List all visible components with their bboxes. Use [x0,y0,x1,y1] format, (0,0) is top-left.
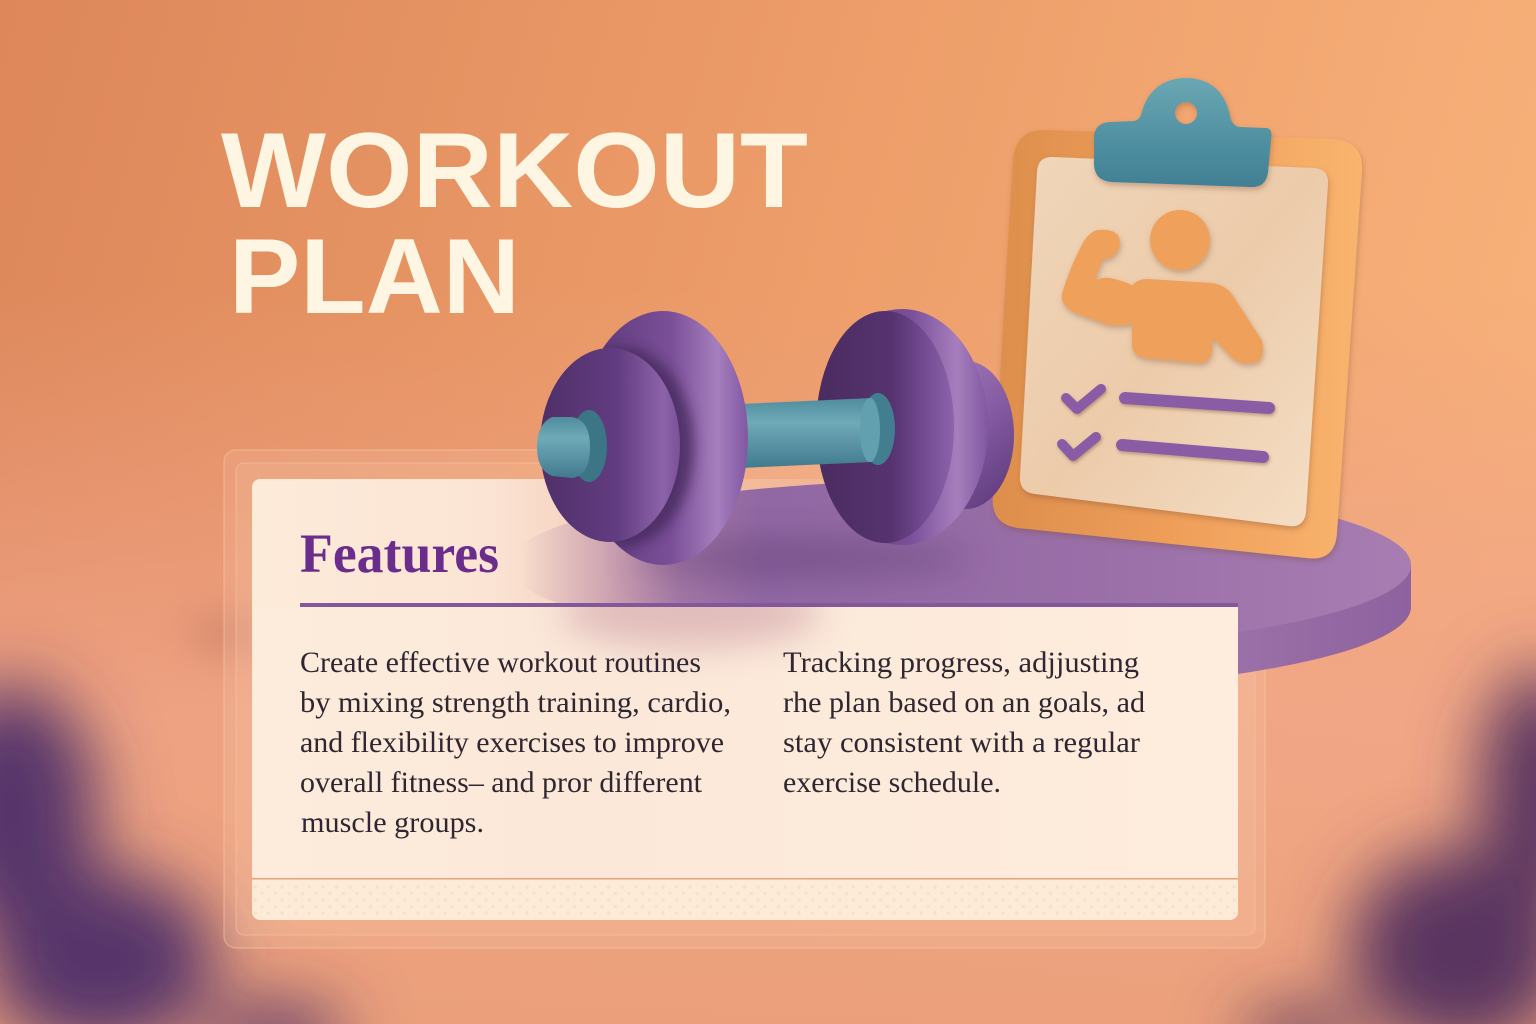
checklist row 1 [1066,389,1269,409]
left front plate [540,348,680,542]
end cap [537,417,590,478]
text block: left column: muscle groups. [301,806,484,839]
dumbbell [537,309,1014,565]
blurred purple foliage bottom right [1240,670,1536,1024]
panel: dotted footer strip [252,878,1238,920]
text block: left column: overall fitness– and pror different [300,766,703,799]
text block: right column: stay consistent with a regular [783,726,1140,759]
text block: right column: exercise schedule. [783,766,1001,799]
text block: left column [300,646,731,839]
right main plate rim [816,309,988,545]
end cap collar [571,410,607,482]
text block: right column: Tracking progress, adjjusting [783,646,1139,679]
icon: flexing figure head [1150,210,1210,270]
handle collar [861,393,895,465]
panel: top cream section [252,479,1238,607]
title [221,110,808,336]
right outer small plate [918,361,1014,509]
icon: flexing figure body [1064,232,1261,361]
title: PLAN [229,216,520,336]
clipboard paper [1020,157,1328,526]
soft pink shade in panel [554,607,827,664]
platform disc [535,484,1411,674]
clipboard board [993,130,1362,558]
text block: left column: and flexibility exercises to improve [300,726,724,759]
text block: right column [783,646,1145,799]
panel: outer glass frames [224,450,1265,948]
heading: features: Features [300,523,499,584]
handle bar [740,398,872,468]
soft shadow left of panel [185,612,275,656]
right main plate face [816,311,954,543]
left plate contact shadow [603,342,701,552]
text block: right column: rhe plan based on an goals, ad [783,686,1145,719]
title: WORKOUT [221,110,808,230]
text block: left column: by mixing strength training, cardio, [300,686,731,719]
blurred purple foliage bottom left [0,685,345,1024]
clipboard [993,78,1362,558]
panel: bottom cream section [252,607,1238,878]
heading rule [300,603,1238,607]
text block: left column: Create effective workout routines [300,646,701,679]
checklist row 2 [1062,437,1263,457]
dumbbell shadow on platform [630,540,970,576]
clipboard clip [1094,78,1271,187]
left rear plate [578,311,748,565]
